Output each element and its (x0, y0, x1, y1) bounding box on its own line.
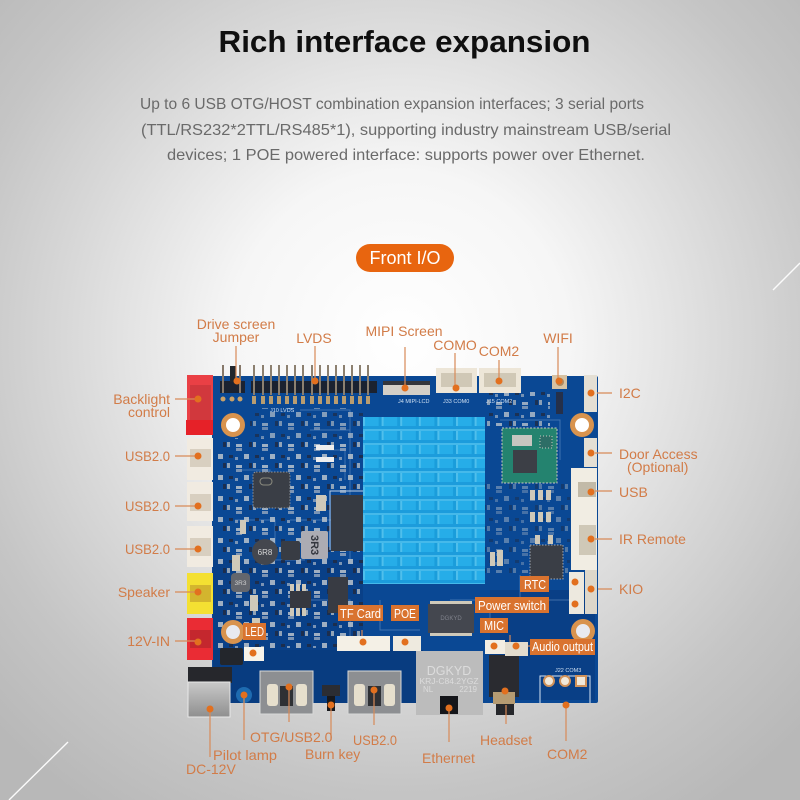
burn key (322, 685, 340, 711)
callout labels (113, 316, 698, 777)
small component texture: right area (485, 484, 570, 574)
MCU (530, 545, 563, 579)
USB2.0 connector 2 (187, 482, 213, 521)
label: RTC: RTC (524, 577, 546, 592)
chip SOP (290, 591, 311, 608)
TF card connector (337, 636, 390, 651)
ethernet transformer (428, 604, 474, 633)
label: USB2.0 second: USB2.0 (125, 498, 170, 514)
Audio connector (505, 642, 528, 656)
label: Drive screen Jumper: Drive screen (197, 316, 275, 332)
label: Drive screen Jumper: Jumper (213, 329, 260, 345)
LVDS pin header (251, 365, 377, 404)
silk labels: J22 COM3 (555, 668, 581, 674)
LED (220, 647, 264, 665)
inductor 6R8 (252, 539, 278, 565)
Ethernet port: DGKYD (427, 664, 471, 678)
MIC connector (485, 640, 505, 654)
small component texture: above WiFi module (486, 392, 550, 426)
jumper pin header (220, 365, 245, 402)
label: USB2.0 third: USB2.0 (125, 541, 170, 557)
description text (140, 96, 671, 164)
decorative corner line: top right (773, 263, 800, 290)
label: COMO: COMO (433, 337, 477, 353)
chip logo (260, 478, 272, 485)
I2C connector (584, 375, 597, 412)
section pill: Front I/O (356, 244, 454, 272)
Headset jack (489, 655, 519, 715)
WiFi module shield (512, 435, 532, 446)
label: WIFI: WIFI (543, 330, 573, 346)
DC jack (188, 667, 232, 717)
WiFi module chip (513, 450, 537, 473)
silk labels: J15 COM2 (486, 399, 512, 405)
label: Speaker: Speaker (118, 584, 170, 600)
WiFi module parts (540, 436, 552, 448)
KIO connectors (569, 570, 597, 614)
POE connector (393, 636, 421, 651)
Backlight connector (186, 375, 213, 435)
label: Headset: Headset (480, 732, 532, 748)
mounting hole: top left (224, 416, 242, 434)
decorative corner line: bottom left (9, 742, 68, 800)
Door Access connector (584, 438, 597, 467)
label: Door Access (Optional): (Optional) (627, 459, 688, 475)
PCB base (212, 376, 598, 703)
silk labels (270, 399, 581, 674)
chip small (281, 541, 300, 560)
label: Drive screen Jumper (197, 316, 275, 345)
USB2.0 connector 1 (187, 438, 213, 480)
IR Remote connector (571, 510, 597, 570)
description text: (TTL/RS232*2TTL/RS485*1), supporting industry mainstream USB/serial (141, 122, 671, 139)
Speaker connector (187, 573, 213, 614)
small component texture: top strip (250, 408, 363, 438)
COM2 bottom footprint (540, 676, 590, 703)
Ethernet port: KRJ-C84.2YGZ (419, 676, 479, 686)
label: Backlight control: Backlight (113, 391, 170, 407)
label: TF Card: TF Card (340, 606, 381, 621)
label: Door Access (Optional) (619, 446, 698, 475)
description text: Up to 6 USB OTG/HOST combination expansion interfaces; 3 serial ports (140, 96, 644, 113)
USB port 2 (348, 671, 401, 714)
label: I2C: I2C (619, 385, 641, 401)
PCB traces (235, 410, 570, 640)
USB right connector (571, 468, 597, 510)
small component texture: left area (216, 438, 363, 648)
label: USB2.0 bottom: USB2.0 (353, 732, 397, 748)
USB port OTG (260, 671, 313, 714)
heatsink (363, 417, 485, 584)
COMO connector (436, 368, 477, 393)
label: Ethernet: Ethernet (422, 750, 475, 766)
memory chip U1 (331, 495, 363, 551)
Ethernet port (416, 651, 483, 715)
label: Backlight control (113, 391, 170, 420)
WiFi module (502, 428, 557, 483)
Ethernet port: NL (423, 685, 434, 694)
label: DC-12V: DC-12V (186, 761, 236, 777)
inductor 3R3 lower: 3R3 (235, 580, 247, 587)
description text: devices; 1 POE powered interface: supports power over Ethernet. (167, 147, 645, 164)
silk labels: J10 LVDS (270, 408, 295, 414)
leader line and dots (175, 346, 612, 757)
mounting hole: bottom left (224, 622, 242, 642)
silk labels: J33 COM0 (443, 399, 469, 405)
orange-boxed labels on board (243, 576, 595, 655)
label: COM2 top: COM2 (479, 343, 519, 359)
inductor 6R8: 6R8 (258, 548, 273, 557)
Ethernet port: 2219 (459, 685, 478, 694)
pilot lamp (236, 687, 252, 703)
inductor 3R3 label: 3R3 (308, 535, 320, 555)
memory chip outline (330, 491, 363, 550)
label: MIC: MIC (484, 618, 504, 633)
title: Rich interface expansion (218, 24, 590, 59)
WiFi antenna socket (552, 375, 567, 414)
mounting hole: top right (572, 416, 592, 434)
label: KIO: KIO (619, 581, 643, 597)
label: MIPI Screen: MIPI Screen (365, 323, 443, 339)
12V-IN connector (187, 618, 213, 660)
label: Audio output: Audio output (532, 639, 593, 654)
section pill: Front I/O: Front I/O (369, 248, 441, 268)
label: POE: POE (394, 606, 416, 621)
mounting hole: bottom right (574, 622, 592, 640)
chip UP1 (253, 472, 290, 508)
label: LVDS: LVDS (296, 330, 332, 346)
label: Burn key: Burn key (305, 746, 360, 762)
transformer marking: DGKYD (440, 616, 462, 622)
label: IR Remote: IR Remote (619, 531, 686, 547)
label: Pilot lamp: Pilot lamp (213, 747, 277, 763)
label: OTG/USB2.0: OTG/USB2.0 (250, 729, 333, 745)
USB2.0 connector 3 (187, 526, 213, 567)
MIPI FPC connector (383, 381, 430, 395)
label: USB: USB (619, 484, 648, 500)
label: USB2.0 first: USB2.0 (125, 448, 170, 464)
PCB copper shading (213, 560, 595, 703)
label: LED (243, 623, 266, 640)
label: Backlight control: control (128, 404, 170, 420)
label: Door Access (Optional): Door Access (619, 446, 698, 462)
small SMD components (232, 445, 553, 636)
silk labels: J4 MIPI-LCD (398, 399, 430, 405)
label: 12V-IN: 12V-IN (127, 633, 170, 649)
chip TSSOP (328, 577, 348, 613)
label: Power switch: Power switch (478, 598, 546, 613)
circuit board photo (186, 365, 598, 717)
inductor 3R3 (301, 531, 328, 559)
COM2 connector (479, 368, 521, 393)
inductor 3R3 lower (231, 573, 250, 592)
label: COM2 bottom: COM2 (547, 746, 588, 762)
label: LED: LED (245, 624, 264, 639)
